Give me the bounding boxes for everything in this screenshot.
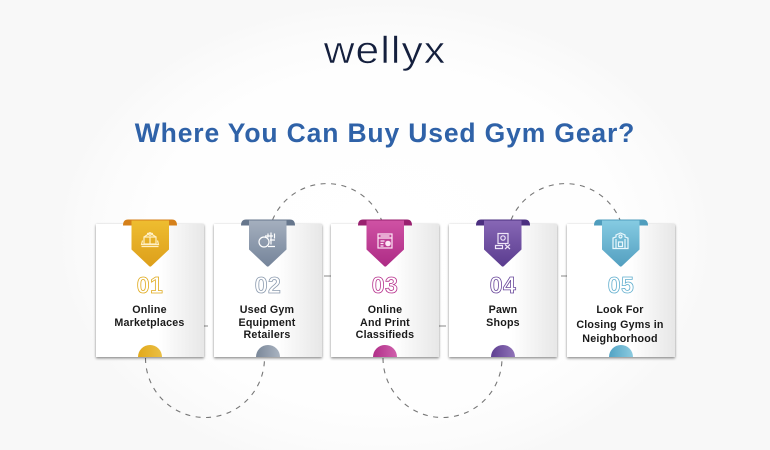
- ribbon 4: [476, 220, 530, 267]
- label 4: Pawn: [489, 304, 517, 316]
- semicircle 3: [373, 345, 397, 357]
- card 3: [331, 224, 439, 357]
- label 3: [356, 304, 414, 341]
- semicircle 1: [138, 345, 162, 357]
- number 02: 02: [255, 272, 281, 298]
- label 5: Closing Gyms in: [576, 318, 664, 330]
- card 1: [96, 224, 204, 357]
- label 1: Marketplaces: [114, 317, 185, 329]
- label 2: [238, 304, 296, 341]
- label 3: Classifieds: [356, 329, 414, 341]
- label 1: Online: [132, 304, 167, 316]
- icon: gym equipment: [259, 232, 275, 247]
- label 5: Look For: [596, 304, 644, 316]
- semicircle 5: [609, 345, 633, 357]
- semicircle 2: [256, 345, 280, 357]
- title: Where You Can Buy Used Gym Gear?: [135, 118, 635, 148]
- card 4: [449, 224, 557, 357]
- card 2: [214, 224, 322, 357]
- number 04: 04: [490, 272, 516, 298]
- label 4: Shops: [486, 317, 520, 329]
- ribbon 3: [358, 220, 412, 267]
- label 1: [114, 304, 185, 329]
- label 3: Online: [368, 304, 402, 316]
- icon: marketplace: [142, 233, 158, 246]
- icon: classifieds: [378, 234, 392, 248]
- card 5: [567, 224, 675, 357]
- ribbon 1: [123, 220, 177, 267]
- semicircle 4: [491, 345, 515, 357]
- label 4: [486, 304, 520, 329]
- label 2: Equipment: [238, 317, 296, 329]
- label 2: Used Gym: [240, 304, 294, 316]
- ribbon 5: [594, 220, 648, 267]
- icon: pawn shop: [496, 234, 510, 249]
- number 01: 01: [137, 272, 163, 298]
- ribbon 2: [241, 220, 295, 267]
- number 03: 03: [372, 272, 398, 298]
- logo: wellyx: [324, 30, 446, 72]
- number 05: 05: [608, 272, 634, 298]
- label 3: And Print: [360, 317, 410, 329]
- label 5: Neighborhood: [582, 333, 658, 345]
- label 5: [576, 304, 664, 345]
- label 2: Retailers: [244, 329, 290, 341]
- icon: closing gym: [613, 233, 628, 248]
